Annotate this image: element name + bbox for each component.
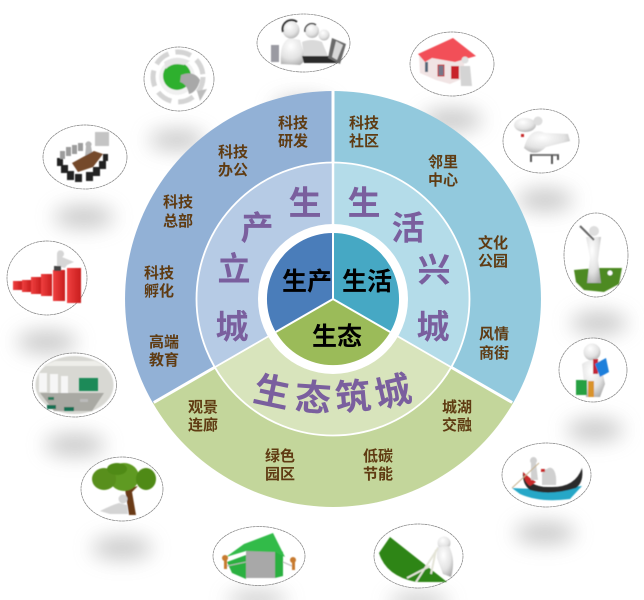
- label: living: 生活: [342, 268, 392, 296]
- labels: living items: 社区: [349, 132, 379, 150]
- labels: production items: 总部: [163, 212, 193, 230]
- labels: living items: 中心: [428, 172, 458, 189]
- labels: production items: 高端: [149, 333, 179, 351]
- segment: production core: [267, 233, 333, 332]
- segment: ecology outer: [153, 299, 513, 507]
- labels: production items: 科技: [218, 143, 248, 161]
- labels: ecology items: 交融: [442, 416, 472, 434]
- heading: 生产立城: [216, 184, 322, 346]
- icon: shopper: [559, 338, 627, 402]
- labels: production items: 科技: [163, 193, 193, 211]
- panel: middle ring: [196, 162, 470, 436]
- segment: ecology core: [276, 299, 390, 365]
- labels: living items: 科技: [349, 114, 379, 132]
- icon: red bar chart: [7, 241, 87, 315]
- icon: green roof house: [213, 526, 305, 586]
- icon: call centre figures: [257, 14, 350, 72]
- icon: figure under tree: [81, 457, 163, 521]
- icon: red roof house: [410, 32, 494, 96]
- labels: production items: 科技: [144, 264, 174, 282]
- labels: production items: [144, 114, 308, 369]
- labels: living items: 商街: [479, 344, 509, 362]
- icon: figure in chair: [503, 109, 579, 173]
- heading: 生态筑城: [250, 368, 415, 420]
- panel: centre pie: [267, 233, 399, 365]
- labels: production items: 孵化: [144, 282, 174, 300]
- labels: ecology items: 节能: [363, 465, 393, 483]
- panel: outer ring: [125, 91, 541, 507]
- label: ecology: 生态: [312, 323, 362, 351]
- labels: production items: 办公: [218, 162, 248, 179]
- heading: 生活兴城: 城: [416, 308, 450, 346]
- segment: production middle: [197, 163, 333, 367]
- heading: 生态筑城: 城: [371, 368, 415, 416]
- heading: 生活兴城: 兴: [418, 252, 450, 288]
- labels: ecology items: [188, 398, 472, 483]
- icon: grass and scissors: [374, 524, 463, 588]
- labels: ecology items: 低碳: [363, 447, 393, 465]
- labels: ecology items: 城湖: [442, 398, 472, 416]
- segment: living outer: [333, 91, 541, 403]
- icon: globe: [144, 47, 214, 111]
- segment: living core: [333, 233, 399, 332]
- heading: 生产立城: 城: [216, 308, 248, 346]
- icon: gondola: [502, 443, 591, 507]
- heading: 生活兴城: 生: [348, 184, 380, 222]
- labels: production items: 教育: [149, 351, 179, 369]
- labels: living items: 公园: [478, 253, 508, 270]
- labels: ecology items: 绿色: [265, 447, 295, 465]
- white ring: [258, 224, 408, 374]
- label: production: 生产: [282, 268, 332, 296]
- icon: golfer: [564, 213, 628, 297]
- heading: 生产立城: 立: [218, 250, 250, 288]
- labels: living items: 文化: [478, 234, 508, 252]
- labels: production items: 科技: [278, 114, 308, 132]
- icon: meeting table: [43, 125, 127, 189]
- labels: ecology items: 园区: [265, 466, 295, 483]
- labels: living items: 风情: [479, 325, 509, 343]
- segment: ecology middle: [215, 299, 451, 435]
- labels: ecology items: 连廊: [188, 416, 218, 434]
- heading: 生产立城: 生: [288, 184, 322, 222]
- heading: 生态筑城: 态: [294, 376, 332, 420]
- labels: ecology items: 观景: [188, 399, 218, 416]
- labels: production items: 研发: [278, 132, 308, 150]
- segment: living middle: [333, 163, 469, 367]
- segment: production outer: [125, 91, 333, 403]
- icon shadows: [17, 98, 627, 600]
- heading: 生态筑城: 筑: [333, 375, 373, 419]
- icon: classroom: [32, 353, 116, 417]
- heading: 生活兴城: [348, 184, 450, 346]
- heading: 生活兴城: 活: [392, 210, 424, 246]
- labels: living items: [349, 114, 509, 362]
- heading: 生产立城: 产: [240, 210, 274, 246]
- heading: 生态筑城: 生: [250, 368, 294, 416]
- labels: living items: 邻里: [428, 154, 458, 171]
